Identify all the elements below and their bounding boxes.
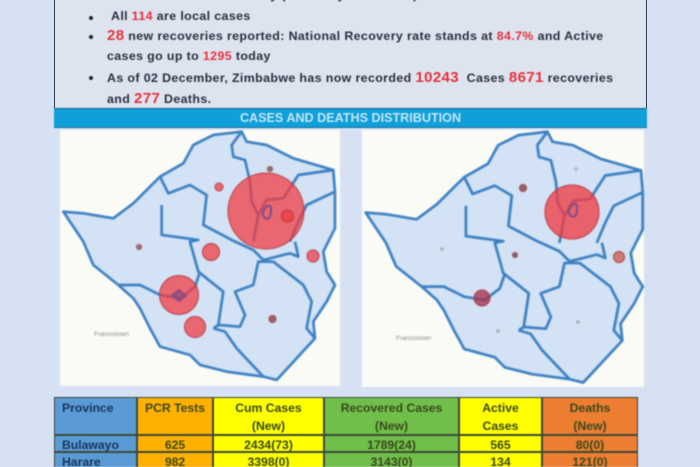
cell: Bulawayo cases — [213, 435, 324, 452]
row: Harare — [54, 452, 137, 467]
header: province: Province — [62, 401, 113, 415]
header: cumulative cases: (New) — [252, 419, 285, 433]
cell: Bulawayo cases: 2434(73) — [244, 438, 293, 452]
header: province — [54, 397, 137, 435]
header: active cases — [459, 397, 542, 435]
header: deaths — [542, 397, 638, 435]
icon: Bulawayo outline — [172, 290, 186, 301]
table: provincial statistics — [53, 396, 639, 467]
header: active cases: Cases — [483, 419, 518, 433]
text: active cases continuation: cases go up to 1295 today — [107, 49, 271, 63]
cell: Bulawayo deaths: 80(0) — [576, 438, 604, 452]
row: Bulawayo: Bulawayo — [62, 438, 119, 452]
cell: Harare cases — [213, 452, 324, 467]
cell: Bulawayo deaths — [542, 435, 638, 452]
header: active cases: Active — [482, 401, 519, 415]
cell: Harare deaths — [542, 452, 638, 467]
text: deaths continuation: and 277 Deaths. — [107, 90, 211, 107]
cell: Harare active — [459, 452, 542, 467]
cell: Bulawayo PCR: 625 — [165, 438, 185, 452]
header: cumulative cases — [213, 397, 324, 435]
label: neighbouring country: Francistown — [396, 335, 431, 342]
cell: Harare PCR — [137, 452, 213, 467]
heading: cases and deaths distribution — [54, 108, 647, 128]
cell: Harare recovered — [324, 452, 459, 467]
header: deaths: (New) — [573, 419, 607, 433]
header: PCR tests: PCR Tests — [145, 401, 205, 415]
bubbles: case counts — [136, 166, 319, 338]
text: local cases bullet: All 114 are local cases — [111, 9, 251, 23]
icon: Harare outline — [569, 204, 577, 217]
text: cumulative totals bullet: As of 02 December, Zimbabwe has now recorded 10243 Cases 8671 recoveries — [107, 69, 613, 86]
header: PCR tests — [137, 397, 213, 435]
panel: deaths map — [362, 130, 644, 387]
heading: cases and deaths distribution: CASES AND DEATHS DISTRIBUTION — [240, 111, 461, 125]
cell: Bulawayo recovered — [324, 435, 459, 452]
cell: Bulawayo recovered: 1789(24) — [367, 438, 416, 452]
cell: Bulawayo active — [459, 435, 542, 452]
panel: summary text — [54, 0, 647, 108]
header: recovered cases: (New) — [375, 419, 408, 433]
header: deaths: Deaths — [570, 401, 610, 415]
map: provinces — [63, 132, 335, 380]
map: provinces — [366, 132, 643, 383]
cell: Bulawayo active: 565 — [490, 438, 511, 452]
text: recoveries bullet: 28 new recoveries reported: National Recovery rate stands at 84.7% and Active — [107, 27, 604, 44]
row: Bulawayo — [54, 435, 137, 452]
cell: Bulawayo PCR — [137, 435, 213, 452]
bubbles: death counts — [440, 167, 624, 333]
header: cumulative cases: Cum Cases — [235, 401, 302, 415]
header: recovered cases: Recovered Cases — [341, 401, 442, 415]
label: neighbouring country: Francistown — [94, 331, 129, 338]
panel: cases map — [60, 130, 340, 386]
header: recovered cases — [324, 397, 459, 435]
icon: Harare outline — [263, 206, 271, 219]
